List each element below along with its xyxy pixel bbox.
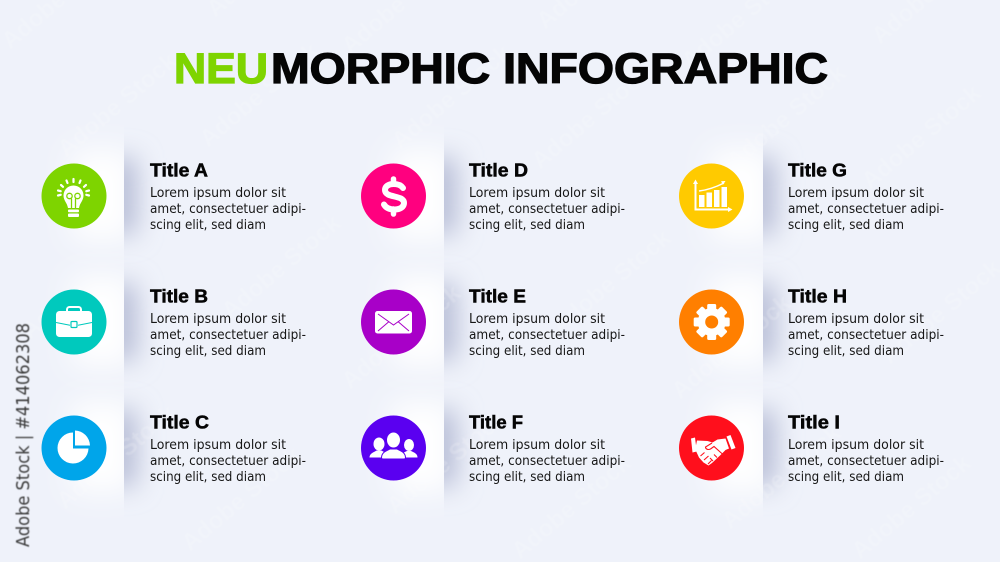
heading: Title B xyxy=(150,286,208,306)
body text xyxy=(469,185,625,233)
body text xyxy=(150,185,306,233)
watermark pattern: Adobe Stock xyxy=(382,404,512,520)
body text: Lorem ipsum dolor sit xyxy=(150,311,286,327)
watermark pattern: Adobe Stock xyxy=(857,79,987,195)
item: Title H xyxy=(679,286,944,359)
body text: scing elit, sed diam xyxy=(150,469,266,485)
body text: scing elit, sed diam xyxy=(150,343,266,359)
body text: Lorem ipsum dolor sit xyxy=(469,185,605,201)
watermark pattern: Adobe Stock xyxy=(547,224,677,340)
icon: briefcase xyxy=(42,290,106,354)
body text: Lorem ipsum dolor sit xyxy=(788,311,924,327)
watermark pattern: Adobe Stock xyxy=(52,399,182,515)
watermark pattern: Adobe Stock xyxy=(177,441,307,557)
heading: Title C xyxy=(150,412,209,432)
body text: Lorem ipsum dolor sit xyxy=(469,311,605,327)
icon: light bulb xyxy=(42,164,106,228)
item: Title D xyxy=(361,160,625,233)
item: Title I xyxy=(679,412,944,485)
watermark pattern: Adobe Stock xyxy=(847,449,977,562)
watermark pattern: Adobe Stock xyxy=(667,289,797,405)
body text: Lorem ipsum dolor sit xyxy=(469,437,605,453)
body text xyxy=(150,437,306,485)
body text: scing elit, sed diam xyxy=(469,217,585,233)
icon: pie chart xyxy=(42,416,106,480)
heading: Title D xyxy=(469,160,528,180)
body text: amet, consectetuer adipi- xyxy=(469,453,625,469)
title: MORPHIC INFOGRAPHIC xyxy=(271,45,828,93)
body text: amet, consectetuer adipi- xyxy=(150,201,306,217)
body text xyxy=(150,311,306,359)
neumorphic panel shading: column 2 xyxy=(392,150,456,492)
heading: Title E xyxy=(469,286,526,306)
watermark pattern: Adobe Stock xyxy=(337,279,467,395)
item: Title A xyxy=(42,160,306,233)
watermark pattern: Adobe Stock xyxy=(722,59,852,175)
item: Title B xyxy=(42,286,306,359)
icon: gear xyxy=(679,290,744,354)
body text: scing elit, sed diam xyxy=(788,217,904,233)
title: NEU xyxy=(174,45,268,93)
body text: Lorem ipsum dolor sit xyxy=(788,185,924,201)
watermark pattern: Adobe Stock xyxy=(53,47,183,163)
watermark pattern: Adobe Stock xyxy=(527,59,657,175)
item: Title C xyxy=(42,412,306,485)
body text: Lorem ipsum dolor sit xyxy=(150,437,286,453)
body text: amet, consectetuer adipi- xyxy=(469,201,625,217)
body text xyxy=(788,311,944,359)
body text: Lorem ipsum dolor sit xyxy=(150,185,286,201)
body text: scing elit, sed diam xyxy=(788,343,904,359)
body text: amet, consectetuer adipi- xyxy=(788,453,944,469)
icon: group of people xyxy=(361,416,426,480)
item: Title F xyxy=(361,412,625,485)
icon: dollar sign xyxy=(361,164,426,228)
watermark pattern: Adobe Stock xyxy=(507,449,637,562)
body text: amet, consectetuer adipi- xyxy=(150,327,306,343)
watermark pattern: Adobe Stock xyxy=(717,419,847,535)
icon: handshake xyxy=(679,416,744,480)
item: Title G xyxy=(679,160,944,233)
watermark pattern: Adobe Stock xyxy=(217,209,347,325)
body text: amet, consectetuer adipi- xyxy=(469,327,625,343)
neumorphic panel shading: column 1 xyxy=(72,150,136,492)
icon: envelope xyxy=(361,290,426,354)
watermark pattern: Adobe Stock xyxy=(195,37,325,153)
heading: Title A xyxy=(150,160,208,180)
watermark pattern: Adobe xyxy=(17,276,91,345)
stock id side label: Adobe Stock | #414062308 xyxy=(13,323,34,547)
heading: Title H xyxy=(788,286,847,306)
body text: scing elit, sed diam xyxy=(788,469,904,485)
body text: amet, consectetuer adipi- xyxy=(150,453,306,469)
neumorphic panel shading: column 3 xyxy=(711,150,775,492)
body text xyxy=(469,437,625,485)
item: Title E xyxy=(361,286,625,359)
body text xyxy=(469,311,625,359)
body text: Lorem ipsum dolor sit xyxy=(788,437,924,453)
body text: scing elit, sed diam xyxy=(469,343,585,359)
heading: Title G xyxy=(788,160,847,180)
body text: amet, consectetuer adipi- xyxy=(788,201,944,217)
body text xyxy=(788,437,944,485)
body text: amet, consectetuer adipi- xyxy=(788,327,944,343)
body text: scing elit, sed diam xyxy=(469,469,585,485)
icon: growth bar chart xyxy=(679,164,744,228)
body text xyxy=(788,185,944,233)
heading: Title F xyxy=(469,412,523,432)
body text: scing elit, sed diam xyxy=(150,217,266,233)
heading: Title I xyxy=(788,412,840,432)
watermark pattern: Adobe Stock xyxy=(387,39,517,155)
